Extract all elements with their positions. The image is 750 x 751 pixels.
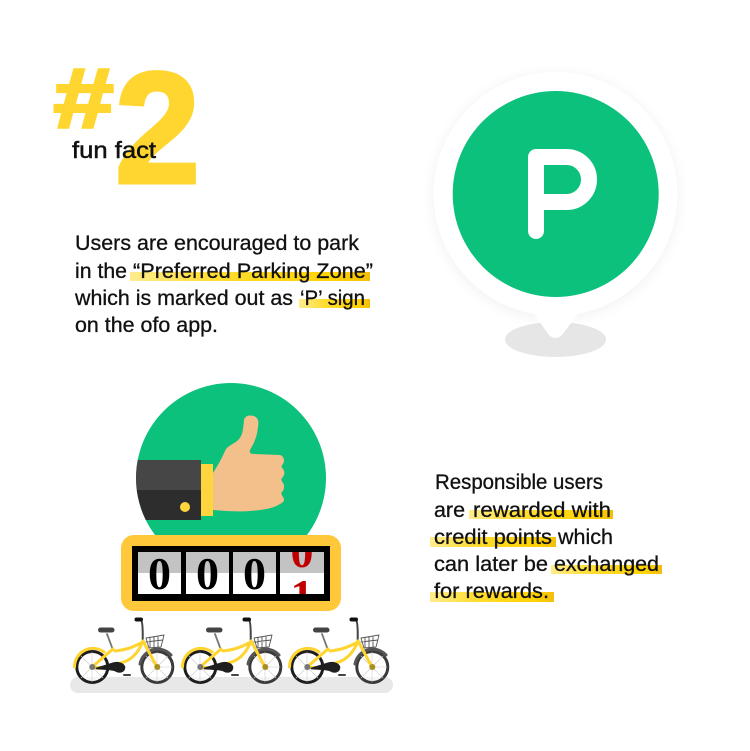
text block: responsible users rewarded: credit points: [434, 526, 552, 549]
text block: preferred parking zone: Users are encouraged to park: [75, 232, 360, 255]
pin shadow: [505, 322, 606, 357]
text block: preferred parking zone: “Preferred Parking Zone”: [133, 260, 373, 283]
highlight: credit points: [430, 537, 556, 547]
numeral 2: 2: [115, 40, 200, 216]
icon: bicycle 3: [289, 620, 388, 682]
pin disc: [434, 72, 678, 316]
text block: preferred parking zone: in the: [75, 260, 127, 283]
counter: [121, 535, 341, 611]
highlight: rewarded with: [469, 510, 613, 519]
text block: responsible users rewarded: rewarded with: [473, 499, 611, 522]
highlight: P sign: [299, 299, 370, 308]
text block: preferred parking zone: on the ofo app.: [75, 314, 218, 337]
digit cell 2: [186, 548, 229, 599]
pin body: [531, 310, 581, 338]
digit cell 4: [280, 552, 324, 594]
digit cell 2: 0: [196, 548, 219, 599]
icon: bicycle 2: [182, 620, 281, 682]
green circle: [136, 383, 326, 573]
icon: parking map pin: [434, 72, 678, 357]
digit cell 3: [233, 548, 276, 599]
counter window: [132, 546, 330, 601]
hash sign: #: [52, 51, 112, 145]
text block: responsible users rewarded: Responsible users: [435, 471, 603, 494]
sleeve: [130, 460, 201, 520]
digit cell 4: 0: [290, 526, 314, 577]
icon: bicycle 1: [74, 620, 173, 682]
cuff: [201, 464, 213, 516]
text block: responsible users rewarded: can later be: [434, 553, 548, 576]
digit cell 1: 0: [148, 548, 171, 599]
text block: preferred parking zone: which is marked out as: [74, 287, 293, 310]
fun fact label: fun fact: [72, 137, 157, 163]
highlight: preferred parking zone: [130, 272, 370, 281]
pin glow: [434, 74, 678, 318]
title: #2 fun fact: [52, 40, 200, 216]
text block: responsible users rewarded: which: [557, 526, 613, 549]
cuff button: [180, 502, 190, 512]
text block: responsible users rewarded: [430, 471, 662, 603]
highlight: for rewards: [430, 592, 554, 602]
counter frame: [121, 535, 341, 611]
digit cell 1: [138, 548, 181, 599]
text block: responsible users rewarded: for rewards.: [434, 580, 549, 603]
hand: [213, 415, 284, 511]
ground shadow: [70, 677, 393, 693]
digit cell 4: 1: [290, 570, 314, 621]
icon: thumbs up: [136, 383, 326, 535]
text block: preferred parking zone: ‘P’ sign: [300, 287, 365, 310]
green circle: [453, 91, 659, 297]
highlight: exchanged: [551, 565, 662, 574]
text block: responsible users rewarded: exchanged: [554, 553, 659, 576]
text block: responsible users rewarded: are: [434, 499, 465, 522]
letter P: [536, 157, 589, 231]
digit cell 3: 0: [243, 548, 266, 599]
text block: preferred parking zone: [74, 232, 373, 337]
